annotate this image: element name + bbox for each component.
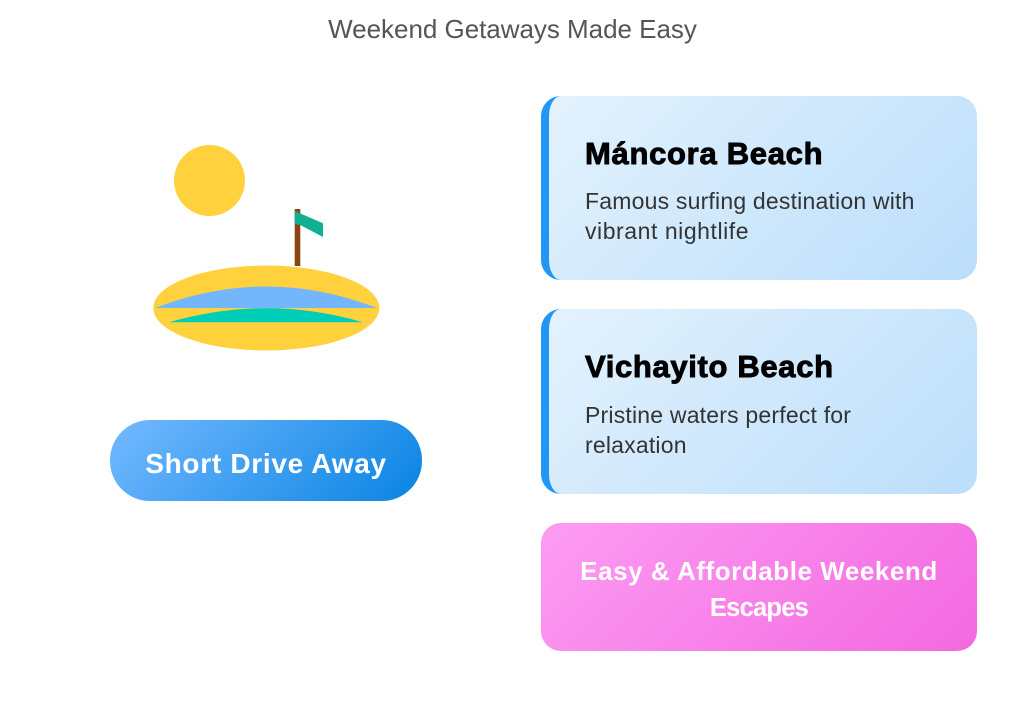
text: Máncora description <box>585 188 915 244</box>
panel: Máncora Beach <box>541 96 977 280</box>
button: short drive away: Short Drive Away <box>145 448 387 479</box>
text: Vichayito description <box>585 402 851 458</box>
panel: Vichayito Beach <box>541 309 977 494</box>
heading: Máncora Beach: Máncora Beach <box>585 136 823 171</box>
icon: flag <box>295 211 323 237</box>
heading: Vichayito Beach: Vichayito Beach <box>585 349 834 384</box>
icon: flag pole <box>295 209 300 266</box>
callout: easy and affordable: Easy & Affordable Weekend <box>580 556 938 586</box>
button: short drive away <box>110 420 422 501</box>
text: Máncora description: vibrant nightlife <box>585 218 749 244</box>
callout: easy and affordable: Escapes <box>710 594 808 622</box>
icon: teal water <box>169 308 363 322</box>
text: Vichayito description: Pristine waters perfect for <box>585 402 851 428</box>
icon: blue water <box>155 286 377 308</box>
beach illustration <box>153 145 380 350</box>
callout: easy and affordable <box>541 523 977 651</box>
text: Máncora description: Famous surfing destination with <box>585 188 915 214</box>
title: Weekend Getaways Made Easy <box>328 14 697 44</box>
text: Vichayito description: relaxation <box>585 432 687 458</box>
icon: sun <box>174 145 245 216</box>
icon: sand island <box>153 266 379 350</box>
